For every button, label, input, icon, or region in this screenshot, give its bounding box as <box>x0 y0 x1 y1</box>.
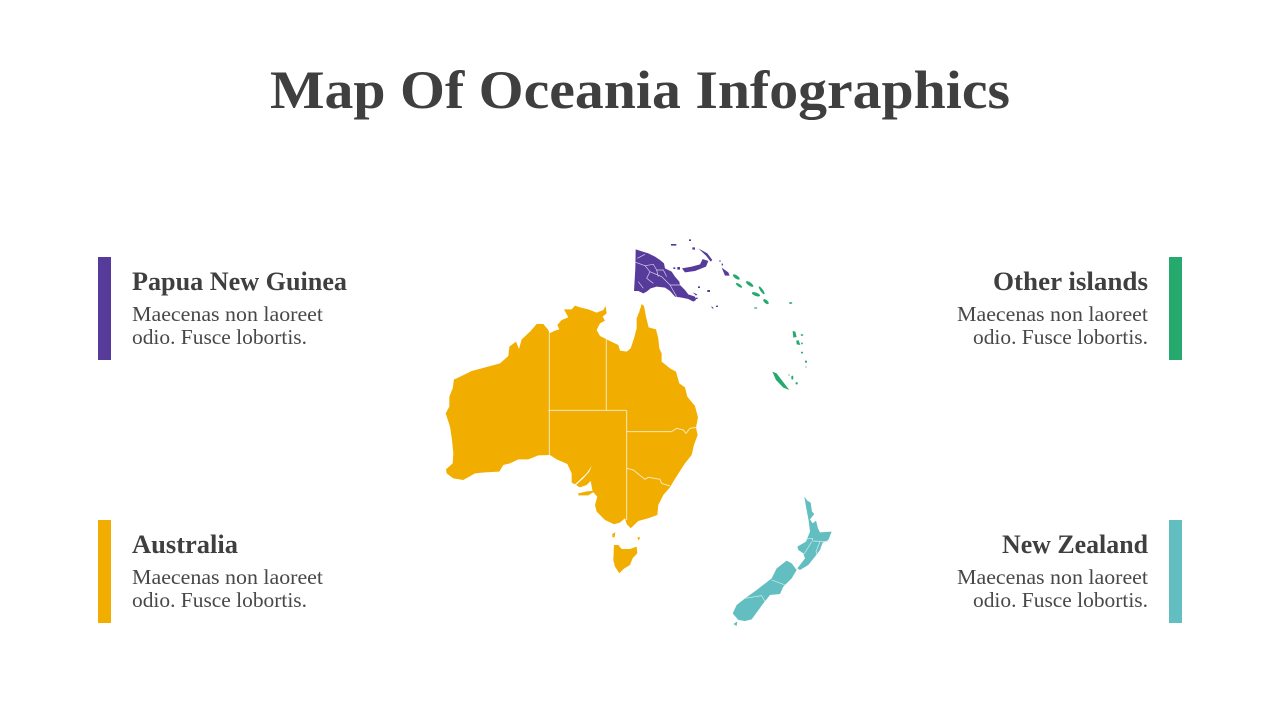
map: NZ regional borders <box>745 538 830 602</box>
text block: New Zealand description: odio. Fusce lobortis. <box>973 588 1148 612</box>
text block: Australia description: odio. Fusce lobortis. <box>132 588 307 612</box>
map: PNG province borders <box>636 254 680 297</box>
text block: Papua New Guinea description <box>132 302 323 349</box>
title: Map Of Oceania Infographics <box>270 60 1010 120</box>
heading: New Zealand: New Zealand <box>1002 530 1149 559</box>
heading: Papua New Guinea: Papua New Guinea <box>132 267 347 296</box>
map: Australia <box>446 304 698 573</box>
map: Papua New Guinea <box>634 239 730 308</box>
colour bar: green <box>1169 257 1182 360</box>
text block: Other islands description: Maecenas non laoreet <box>957 302 1148 326</box>
panel: New Zealand <box>957 520 1182 623</box>
text block: Australia description: Maecenas non laoreet <box>132 565 323 589</box>
map: Tasmania and nearby islands <box>578 491 640 573</box>
panel: Papua New Guinea <box>98 257 347 360</box>
text block: Papua New Guinea description: odio. Fusce lobortis. <box>132 325 307 349</box>
panel: Australia <box>98 520 323 623</box>
map: Australian state borders <box>548 333 697 520</box>
map: other islands <box>732 273 807 390</box>
heading: Australia: Australia <box>132 530 238 559</box>
text block: Other islands description <box>957 302 1148 349</box>
panel: Other islands <box>957 257 1182 360</box>
text block: Papua New Guinea description: Maecenas non laoreet <box>132 302 323 326</box>
text block: Other islands description: odio. Fusce lobortis. <box>973 325 1148 349</box>
heading: Other islands: Other islands <box>993 267 1148 296</box>
text block: New Zealand description: Maecenas non laoreet <box>957 565 1148 589</box>
text block: Australia description <box>132 565 323 612</box>
colour bar: yellow <box>98 520 111 623</box>
colour bar: teal <box>1169 520 1182 623</box>
map: New Zealand <box>733 497 832 626</box>
text block: New Zealand description <box>957 565 1148 612</box>
colour bar: purple <box>98 257 111 360</box>
